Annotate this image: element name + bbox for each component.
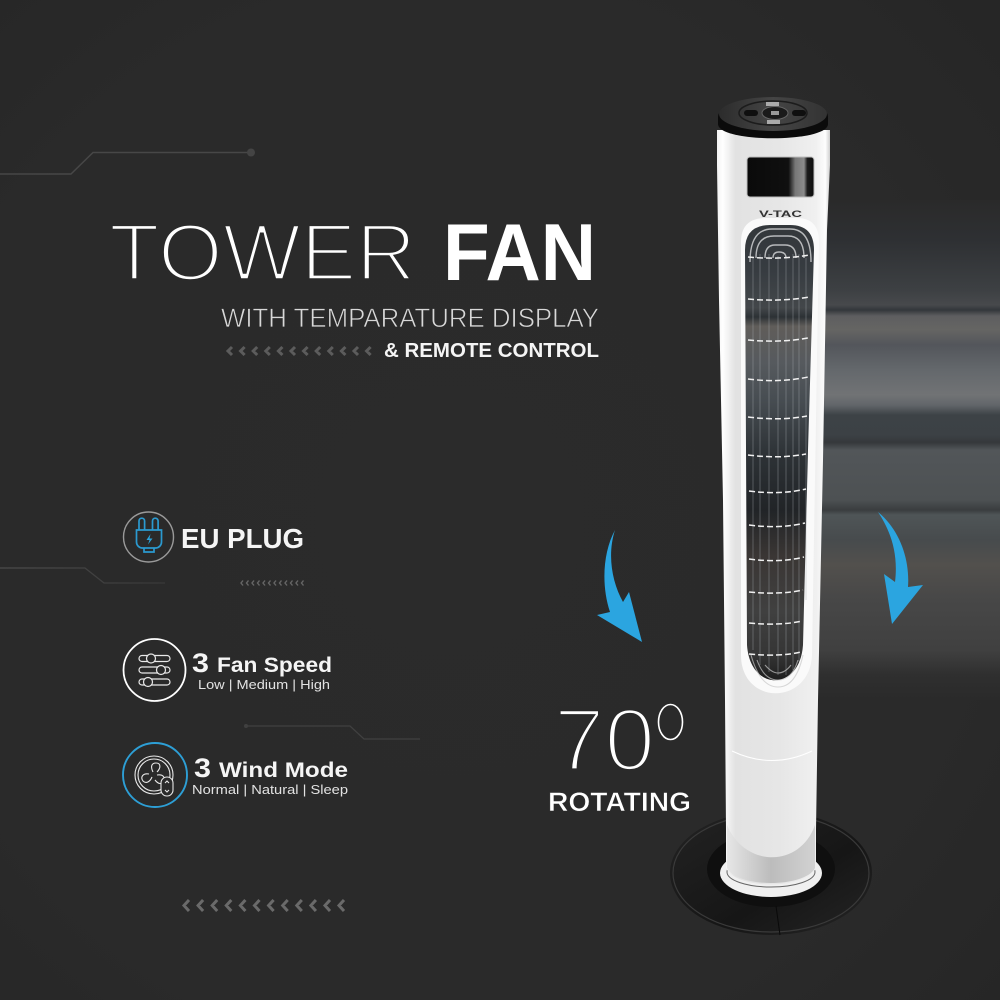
title (109, 208, 596, 298)
circuit line under EU plug (0, 568, 165, 583)
airflow blur behind the fan (810, 200, 1000, 700)
body seam (732, 751, 812, 760)
fan body (717, 130, 830, 884)
top control cap (718, 97, 828, 138)
title word: FAN: FAN (443, 208, 596, 298)
wind mode label (192, 753, 348, 797)
circuit line between features (244, 724, 420, 739)
arrow: right rotation (878, 512, 923, 624)
circuit line top left (0, 148, 255, 174)
mode options: Normal | Natural | Sleep (192, 783, 348, 797)
chevrons beside subtitle (228, 347, 371, 355)
number 3: 3 (194, 753, 211, 783)
rotating label: ROTATING (548, 787, 691, 817)
vertical vanes (753, 254, 806, 675)
title word: TOWER: TOWER (109, 208, 416, 298)
grille (745, 225, 814, 687)
EU plug label: EU PLUG (181, 523, 304, 554)
temperature display window (747, 157, 814, 197)
subtitle line one: WITH TEMPARATURE DISPLAY (221, 303, 599, 333)
number 3: 3 (192, 648, 209, 678)
heading: Fan Speed: Fan Speed (217, 654, 332, 677)
lower frosted section (727, 825, 815, 883)
icon: fan speed sliders (124, 639, 186, 701)
arrow: left rotation (597, 530, 642, 642)
rotation angle (548, 690, 691, 817)
angle value 70: 70 (554, 690, 655, 789)
dashed ribs (748, 255, 809, 655)
fan speed label (192, 648, 332, 692)
grille top arches (750, 229, 811, 262)
grille surround (741, 218, 819, 693)
small chevrons under EU plug (241, 580, 304, 586)
speed options: Low | Medium | High (198, 678, 330, 692)
chevrons bottom left (184, 900, 344, 911)
tower fan product (670, 97, 872, 935)
degree mark (658, 704, 682, 740)
fan base (670, 811, 872, 935)
icon: EU plug (124, 512, 174, 562)
grille bottom arches (751, 655, 803, 687)
heading: Wind Mode: Wind Mode (219, 759, 348, 782)
subtitle line two: & REMOTE CONTROL (384, 340, 599, 362)
brand logo: V-TAC (759, 209, 802, 220)
icon: wind mode fan (123, 743, 187, 807)
